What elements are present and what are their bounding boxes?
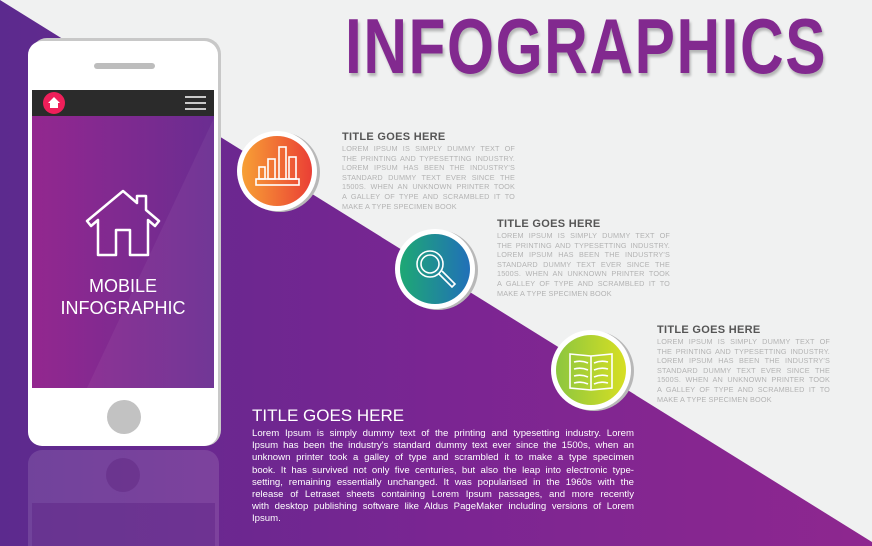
home icon small — [43, 92, 65, 114]
phone — [28, 38, 221, 446]
text block 2: LOREM IPSUM IS SIMPLY DUMMY TEXT OF — [497, 231, 670, 240]
text block 3: TITLE GOES HERE — [657, 324, 761, 336]
text block 2: THE PRINTING AND TYPESETTING INDUSTRY. — [497, 241, 670, 250]
screen — [32, 90, 214, 388]
speaker — [94, 63, 155, 69]
text block 2: STANDARD DUMMY TEXT EVER SINCE THE — [497, 260, 670, 269]
bottom text block: Ipsum has been the industry's standard dummy text ever since the 1500s, when an — [252, 440, 634, 451]
text block 3: MAKE A TYPE SPECIMEN BOOK — [657, 395, 772, 404]
icon: magnifier — [395, 229, 478, 310]
bottom text block: with desktop publishing software like Aldus PageMaker including versions of Lorem — [252, 501, 634, 512]
bottom text block: Ipsum. — [252, 513, 281, 524]
bottom text block: book. It has survived not only five centuries, but also the leap into electronic type- — [252, 465, 634, 476]
text block 1: TITLE GOES HERE — [342, 131, 446, 143]
text block 2 — [497, 218, 670, 298]
text block 1: MAKE A TYPE SPECIMEN BOOK — [342, 202, 457, 211]
phone: INFOGRAPHIC — [60, 298, 186, 318]
text block 2: LOREM IPSUM HAS BEEN THE INDUSTRY'S — [497, 250, 670, 259]
bottom text block: Lorem Ipsum is simply dummy text of the printing and typesetting industry. Lorem — [252, 428, 634, 439]
icon: bar chart — [237, 131, 320, 212]
phone: MOBILE — [89, 276, 157, 296]
bottom text block: setting, remaining essentially unchanged. It was popularised in the 1960s with the — [252, 477, 634, 488]
text block 3: A GALLEY OF TYPE AND SCRAMBLED IT TO — [657, 385, 830, 394]
bottom text block: TITLE GOES HERE — [252, 406, 404, 425]
text block 2: MAKE A TYPE SPECIMEN BOOK — [497, 289, 612, 298]
text block 3 — [657, 324, 830, 404]
text block 1: LOREM IPSUM IS SIMPLY DUMMY TEXT OF — [342, 144, 515, 153]
text block 2: A GALLEY OF TYPE AND SCRAMBLED IT TO — [497, 279, 670, 288]
title: INFOGRAPHICS — [345, 2, 827, 90]
text block 1: STANDARD DUMMY TEXT EVER SINCE THE — [342, 173, 515, 182]
text block 1: THE PRINTING AND TYPESETTING INDUSTRY. — [342, 154, 515, 163]
text block 1: 1500S. WHEN AN UNKNOWN PRINTER TOOK — [342, 182, 515, 191]
home button — [107, 400, 141, 434]
text block 1: A GALLEY OF TYPE AND SCRAMBLED IT TO — [342, 192, 515, 201]
text block 3: STANDARD DUMMY TEXT EVER SINCE THE — [657, 366, 830, 375]
phone reflection — [28, 450, 219, 546]
text block 3: LOREM IPSUM HAS BEEN THE INDUSTRY'S — [657, 356, 830, 365]
house outline — [87, 191, 159, 255]
text block 3: LOREM IPSUM IS SIMPLY DUMMY TEXT OF — [657, 337, 830, 346]
text block 1: LOREM IPSUM HAS BEEN THE INDUSTRY'S — [342, 163, 515, 172]
bottom text block: unknown printer took a galley of type and scrambled it to make a type specimen — [252, 452, 634, 463]
bottom text block: release of Letraset sheets containing Lorem Ipsum passages, and more recently — [252, 489, 634, 500]
icon: book — [551, 330, 634, 411]
text block 2: 1500S. WHEN AN UNKNOWN PRINTER TOOK — [497, 269, 670, 278]
text block 1 — [342, 131, 515, 211]
bottom text block — [252, 406, 634, 524]
text block 3: THE PRINTING AND TYPESETTING INDUSTRY. — [657, 347, 830, 356]
text block 3: 1500S. WHEN AN UNKNOWN PRINTER TOOK — [657, 375, 830, 384]
text block 2: TITLE GOES HERE — [497, 218, 601, 230]
